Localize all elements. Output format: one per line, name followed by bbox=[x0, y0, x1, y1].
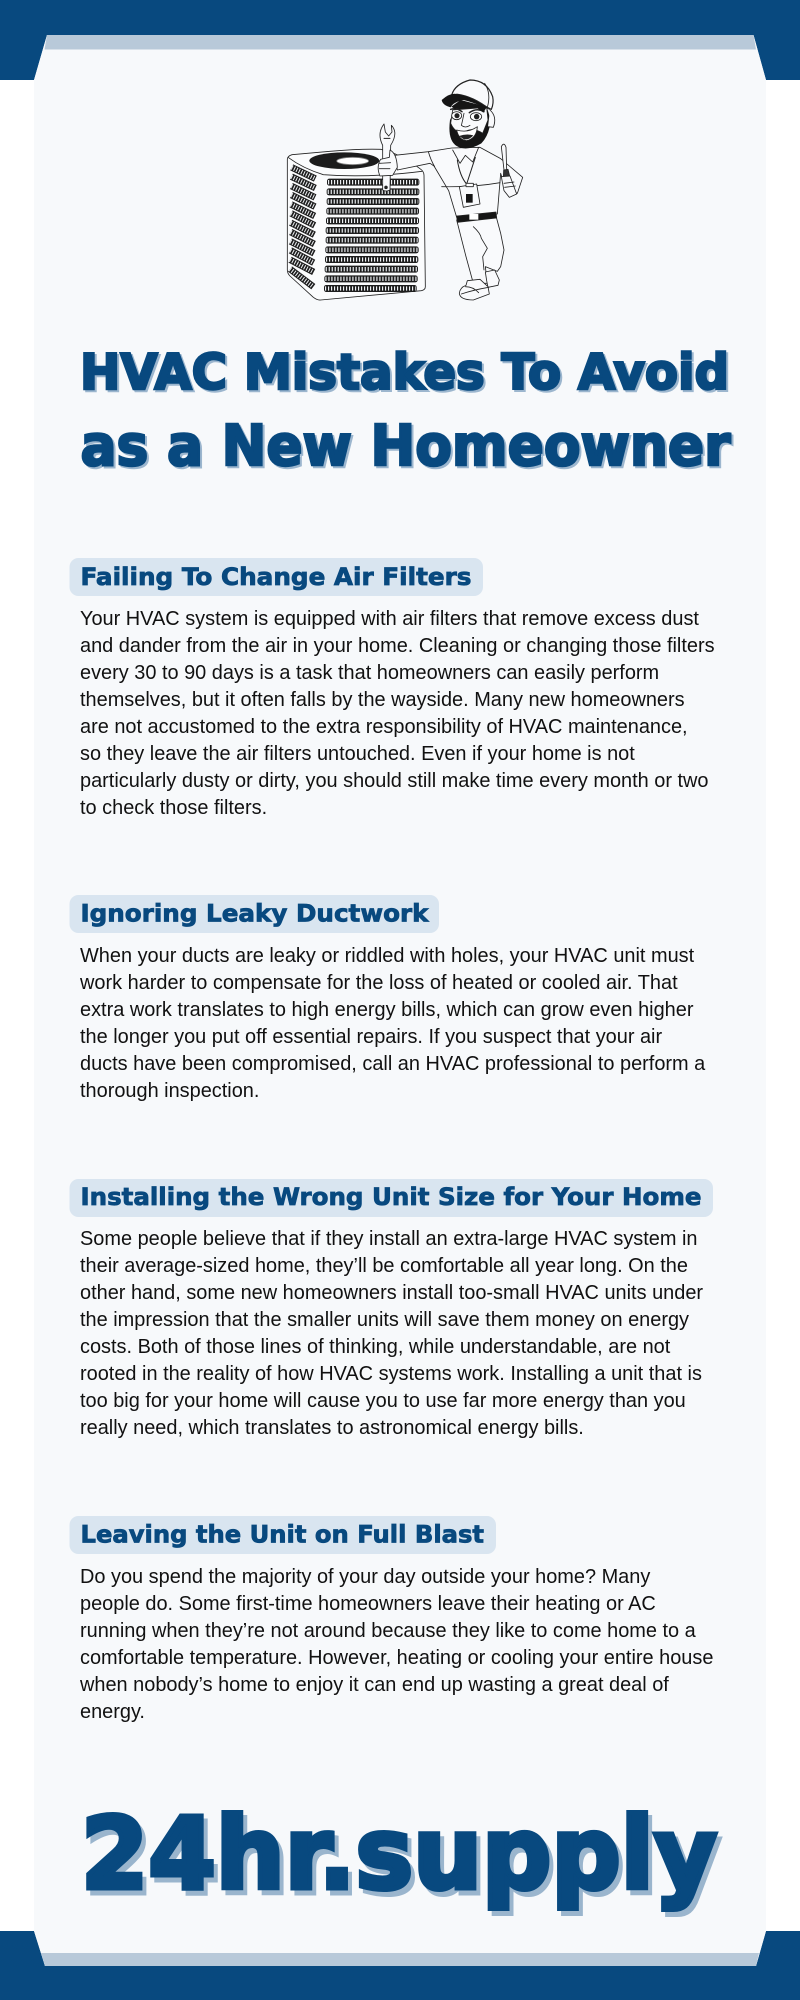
screwdriver bbox=[501, 144, 507, 170]
mouth bbox=[457, 127, 477, 141]
pants bbox=[457, 216, 504, 283]
hair bbox=[451, 100, 487, 113]
body text: the longer you put off essential repairs. If you suspect that your air bbox=[80, 1026, 662, 1048]
body text: running when they’re not around because they like to come home to a bbox=[80, 1620, 696, 1642]
body text: other hand, some new homeowners install too-small HVAC units under bbox=[80, 1282, 703, 1304]
body text: rooted in the reality of how HVAC systems work. Installing a unit that is bbox=[80, 1363, 702, 1385]
heading chip: Failing To Change Air Filters bbox=[80, 563, 472, 591]
body text: their average-sized home, they’ll be comfortable all year long. On the bbox=[80, 1255, 688, 1277]
body text: extra work translates to high energy bills, which can grow even higher bbox=[80, 999, 693, 1021]
title: as a New Homeowner bbox=[80, 414, 731, 479]
heading chip bbox=[70, 558, 483, 596]
body text: themselves, but it often falls by the wayside. Many new homeowners bbox=[80, 689, 685, 711]
body text bbox=[80, 945, 706, 1102]
eyes bbox=[452, 112, 462, 120]
body text: Some people believe that if they install an extra-large HVAC system in bbox=[80, 1228, 698, 1250]
section 4: Leaving the Unit on Full Blast bbox=[70, 1516, 713, 1723]
heading chip: Leaving the Unit on Full Blast bbox=[80, 1521, 484, 1549]
illustration: AC unit and technician bbox=[286, 79, 524, 300]
footer brand: 24hr.supply: 24hr.supply bbox=[81, 1797, 717, 1912]
front grille bbox=[324, 179, 419, 292]
body text bbox=[80, 608, 715, 819]
technician bbox=[378, 80, 523, 300]
section 1: Failing To Change Air Filters bbox=[70, 558, 715, 819]
body text: Your HVAC system is equipped with air filters that remove excess dust bbox=[80, 608, 699, 630]
heading chip: Installing the Wrong Unit Size for Your Home bbox=[80, 1183, 702, 1211]
lanyard bbox=[457, 157, 475, 184]
heading chip bbox=[70, 895, 439, 933]
bottom light strip bbox=[41, 1953, 759, 1966]
body text bbox=[80, 1566, 713, 1723]
AC unit bbox=[287, 149, 425, 300]
side grille bbox=[290, 167, 315, 287]
front shoe bbox=[459, 279, 489, 300]
body text: too big for your home will cause you to use far more energy than you bbox=[80, 1390, 686, 1412]
heading chip: Ignoring Leaky Ductwork bbox=[80, 900, 430, 928]
bottom navy band bbox=[0, 1931, 800, 2000]
body text: thorough inspection. bbox=[80, 1080, 259, 1102]
belt bbox=[457, 212, 497, 222]
head and beard bbox=[449, 100, 491, 148]
body text: When your ducts are leaky or riddled with holes, your HVAC unit must bbox=[80, 945, 694, 967]
title: HVAC Mistakes To Avoid bbox=[80, 344, 729, 401]
body text: are not accustomed to the extra responsibility of HVAC maintenance, bbox=[80, 716, 688, 738]
shirt bbox=[395, 147, 523, 217]
body text: work harder to compensate for the loss of heated or cooled air. That bbox=[80, 972, 678, 994]
body text: to check those filters. bbox=[80, 797, 267, 819]
body text: energy. bbox=[80, 1701, 145, 1723]
right hand bbox=[501, 176, 517, 197]
body text: and dander from the air in your home. Cleaning or changing those filters bbox=[80, 635, 715, 657]
heading chip bbox=[70, 1179, 713, 1217]
body text: costs. Both of those lines of thinking, while understandable, are not bbox=[80, 1336, 670, 1358]
top light strip bbox=[44, 35, 756, 50]
badge bbox=[459, 184, 480, 207]
body text: so they leave the air filters untouched. Even if your home is not bbox=[80, 743, 635, 765]
section 3: Installing the Wrong Unit Size for Your Home bbox=[70, 1179, 713, 1439]
cap bbox=[452, 80, 493, 109]
rear shoe bbox=[485, 270, 499, 287]
body text: particularly dusty or dirty, you should still make time every month or two bbox=[80, 770, 709, 792]
heading chip bbox=[70, 1516, 496, 1554]
title bbox=[80, 344, 734, 479]
body text: really need, which translates to astronomical energy bills. bbox=[80, 1417, 584, 1439]
body text: every 30 to 90 days is a task that homeowners can easily perform bbox=[80, 662, 659, 684]
body text: Do you spend the majority of your day outside your home? Many bbox=[80, 1566, 650, 1588]
body text: ducts have been compromised, call an HVAC professional to perform a bbox=[80, 1053, 705, 1075]
body text: when nobody’s home to enjoy it can end up wasting a great deal of bbox=[80, 1674, 669, 1696]
body text: people do. Some first-time homeowners leave their heating or AC bbox=[80, 1593, 656, 1615]
body text bbox=[80, 1228, 703, 1439]
section 2: Ignoring Leaky Ductwork bbox=[70, 895, 706, 1102]
left hand bbox=[378, 150, 397, 176]
body text: comfortable temperature. However, heating or cooling your entire house bbox=[80, 1647, 713, 1669]
wrench bbox=[380, 124, 395, 191]
body text: the impression that the smaller units will save them money on energy bbox=[80, 1309, 689, 1331]
top navy band bbox=[0, 0, 800, 80]
